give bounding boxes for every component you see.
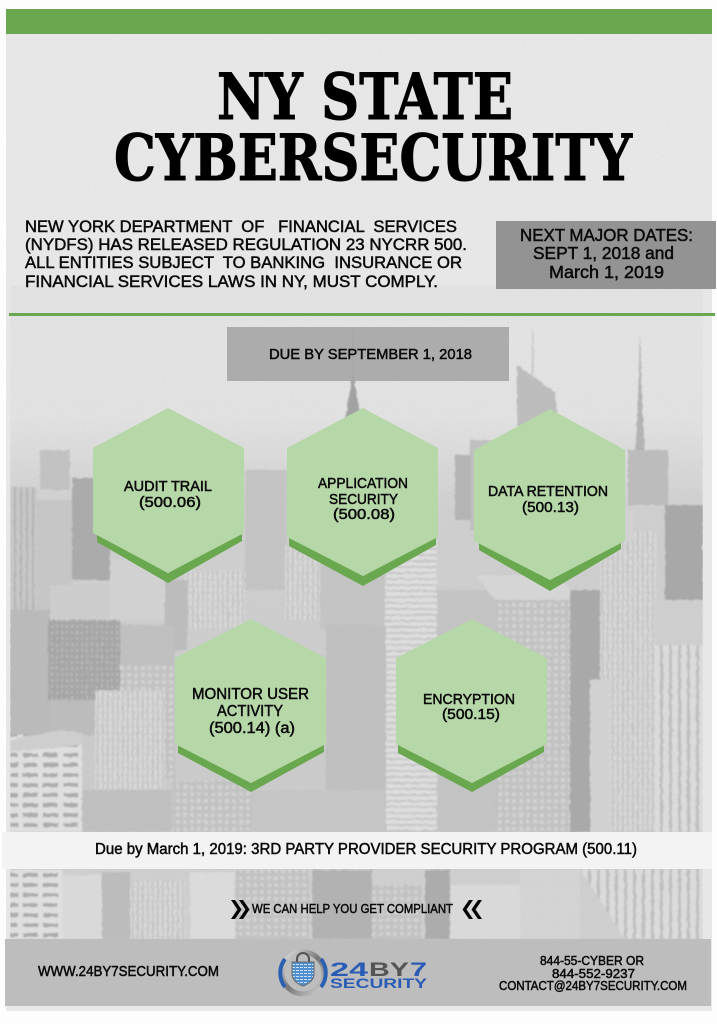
hexagon: monitor user activity: (500.14) (a) (209, 720, 295, 737)
hexagon: monitor user activity: MONITOR USER (192, 686, 309, 703)
heading: due by september 1, 2018: DUE BY SEPTEMBER 1, 2018 (269, 346, 472, 363)
callout: next major dates: NEXT MAJOR DATES: (520, 225, 693, 245)
hexagon: encryption: (500.15) (442, 707, 500, 723)
hexagon: application security: APPLICATION (318, 476, 408, 492)
hexagon: encryption (396, 619, 547, 792)
hexagon: data retention (474, 409, 625, 591)
hexagon: data retention: (500.13) (522, 500, 579, 516)
title (114, 60, 633, 196)
callout: we can help you get compliant: WE CAN HELP YOU GET COMPLIANT (252, 901, 453, 916)
far towers and spires (345, 365, 361, 445)
title: NY STATE (217, 60, 513, 135)
website: WWW.24BY7SECURITY.COM (38, 964, 219, 980)
logo: 24by7 security: BY (369, 960, 409, 981)
band: due by march 1, 2019: Due by March 1, 2019: 3RD PARTY PROVIDER SECURITY PROGRAM (500.11) (95, 841, 637, 858)
logo: 24by7 security: 24 (330, 960, 369, 981)
green divider line (9, 313, 715, 316)
strip below band (10, 869, 703, 939)
hexagon: monitor user activity: ACTIVITY (217, 703, 283, 720)
top green bar (6, 9, 712, 34)
intro text block (25, 217, 467, 291)
contact details: 844-552-9237 (552, 966, 635, 981)
icon: right chevrons (231, 900, 250, 919)
logo: 24by7 security: 7 (410, 960, 427, 981)
intro text block: NEW YORK DEPARTMENT OF FINANCIAL SERVICES (25, 217, 457, 236)
hexagon: application security (287, 408, 438, 586)
contact details: 844-55-CYBER OR (540, 953, 644, 968)
footer bar (5, 939, 711, 1006)
contact details: CONTACT@24BY7SECURITY.COM (499, 978, 687, 993)
hexagon: audit trail: AUDIT TRAIL (124, 479, 212, 495)
hexagon: data retention: DATA RETENTION (488, 484, 608, 500)
hexagon: application security: SECURITY (329, 492, 398, 508)
left towers (10, 487, 37, 832)
callout: next major dates: March 1, 2019 (549, 262, 664, 282)
intro text block: (NYDFS) HAS RELEASED REGULATION 23 NYCRR 500. (25, 235, 467, 254)
logo: 24by7 security: SECURITY (330, 976, 427, 991)
hexagon: audit trail: (500.06) (139, 495, 201, 511)
hexagon: audit trail (93, 408, 244, 583)
logo: 24by7 security (280, 952, 427, 994)
hexagon: encryption: ENCRYPTION (423, 692, 515, 708)
callout: next major dates: SEPT 1, 2018 and (533, 243, 674, 263)
intro text block: ALL ENTITIES SUBJECT TO BANKING INSURANCE OR (25, 253, 462, 272)
hexagon: application security: (500.08) (333, 507, 395, 523)
intro text block: FINANCIAL SERVICES LAWS IN NY, MUST COMPLY. (25, 272, 438, 291)
centre towers (385, 540, 437, 832)
hexagon: monitor user activity (175, 619, 326, 792)
callout: next major dates (496, 221, 716, 289)
icon: left chevrons (462, 900, 482, 919)
background: city skyline (10, 285, 703, 945)
band: due by march 1, 2019 (2, 832, 712, 869)
right towers (437, 590, 495, 832)
front-left white building (10, 735, 82, 832)
heading: due by september 1, 2018 (227, 327, 509, 381)
contact details (499, 953, 687, 993)
